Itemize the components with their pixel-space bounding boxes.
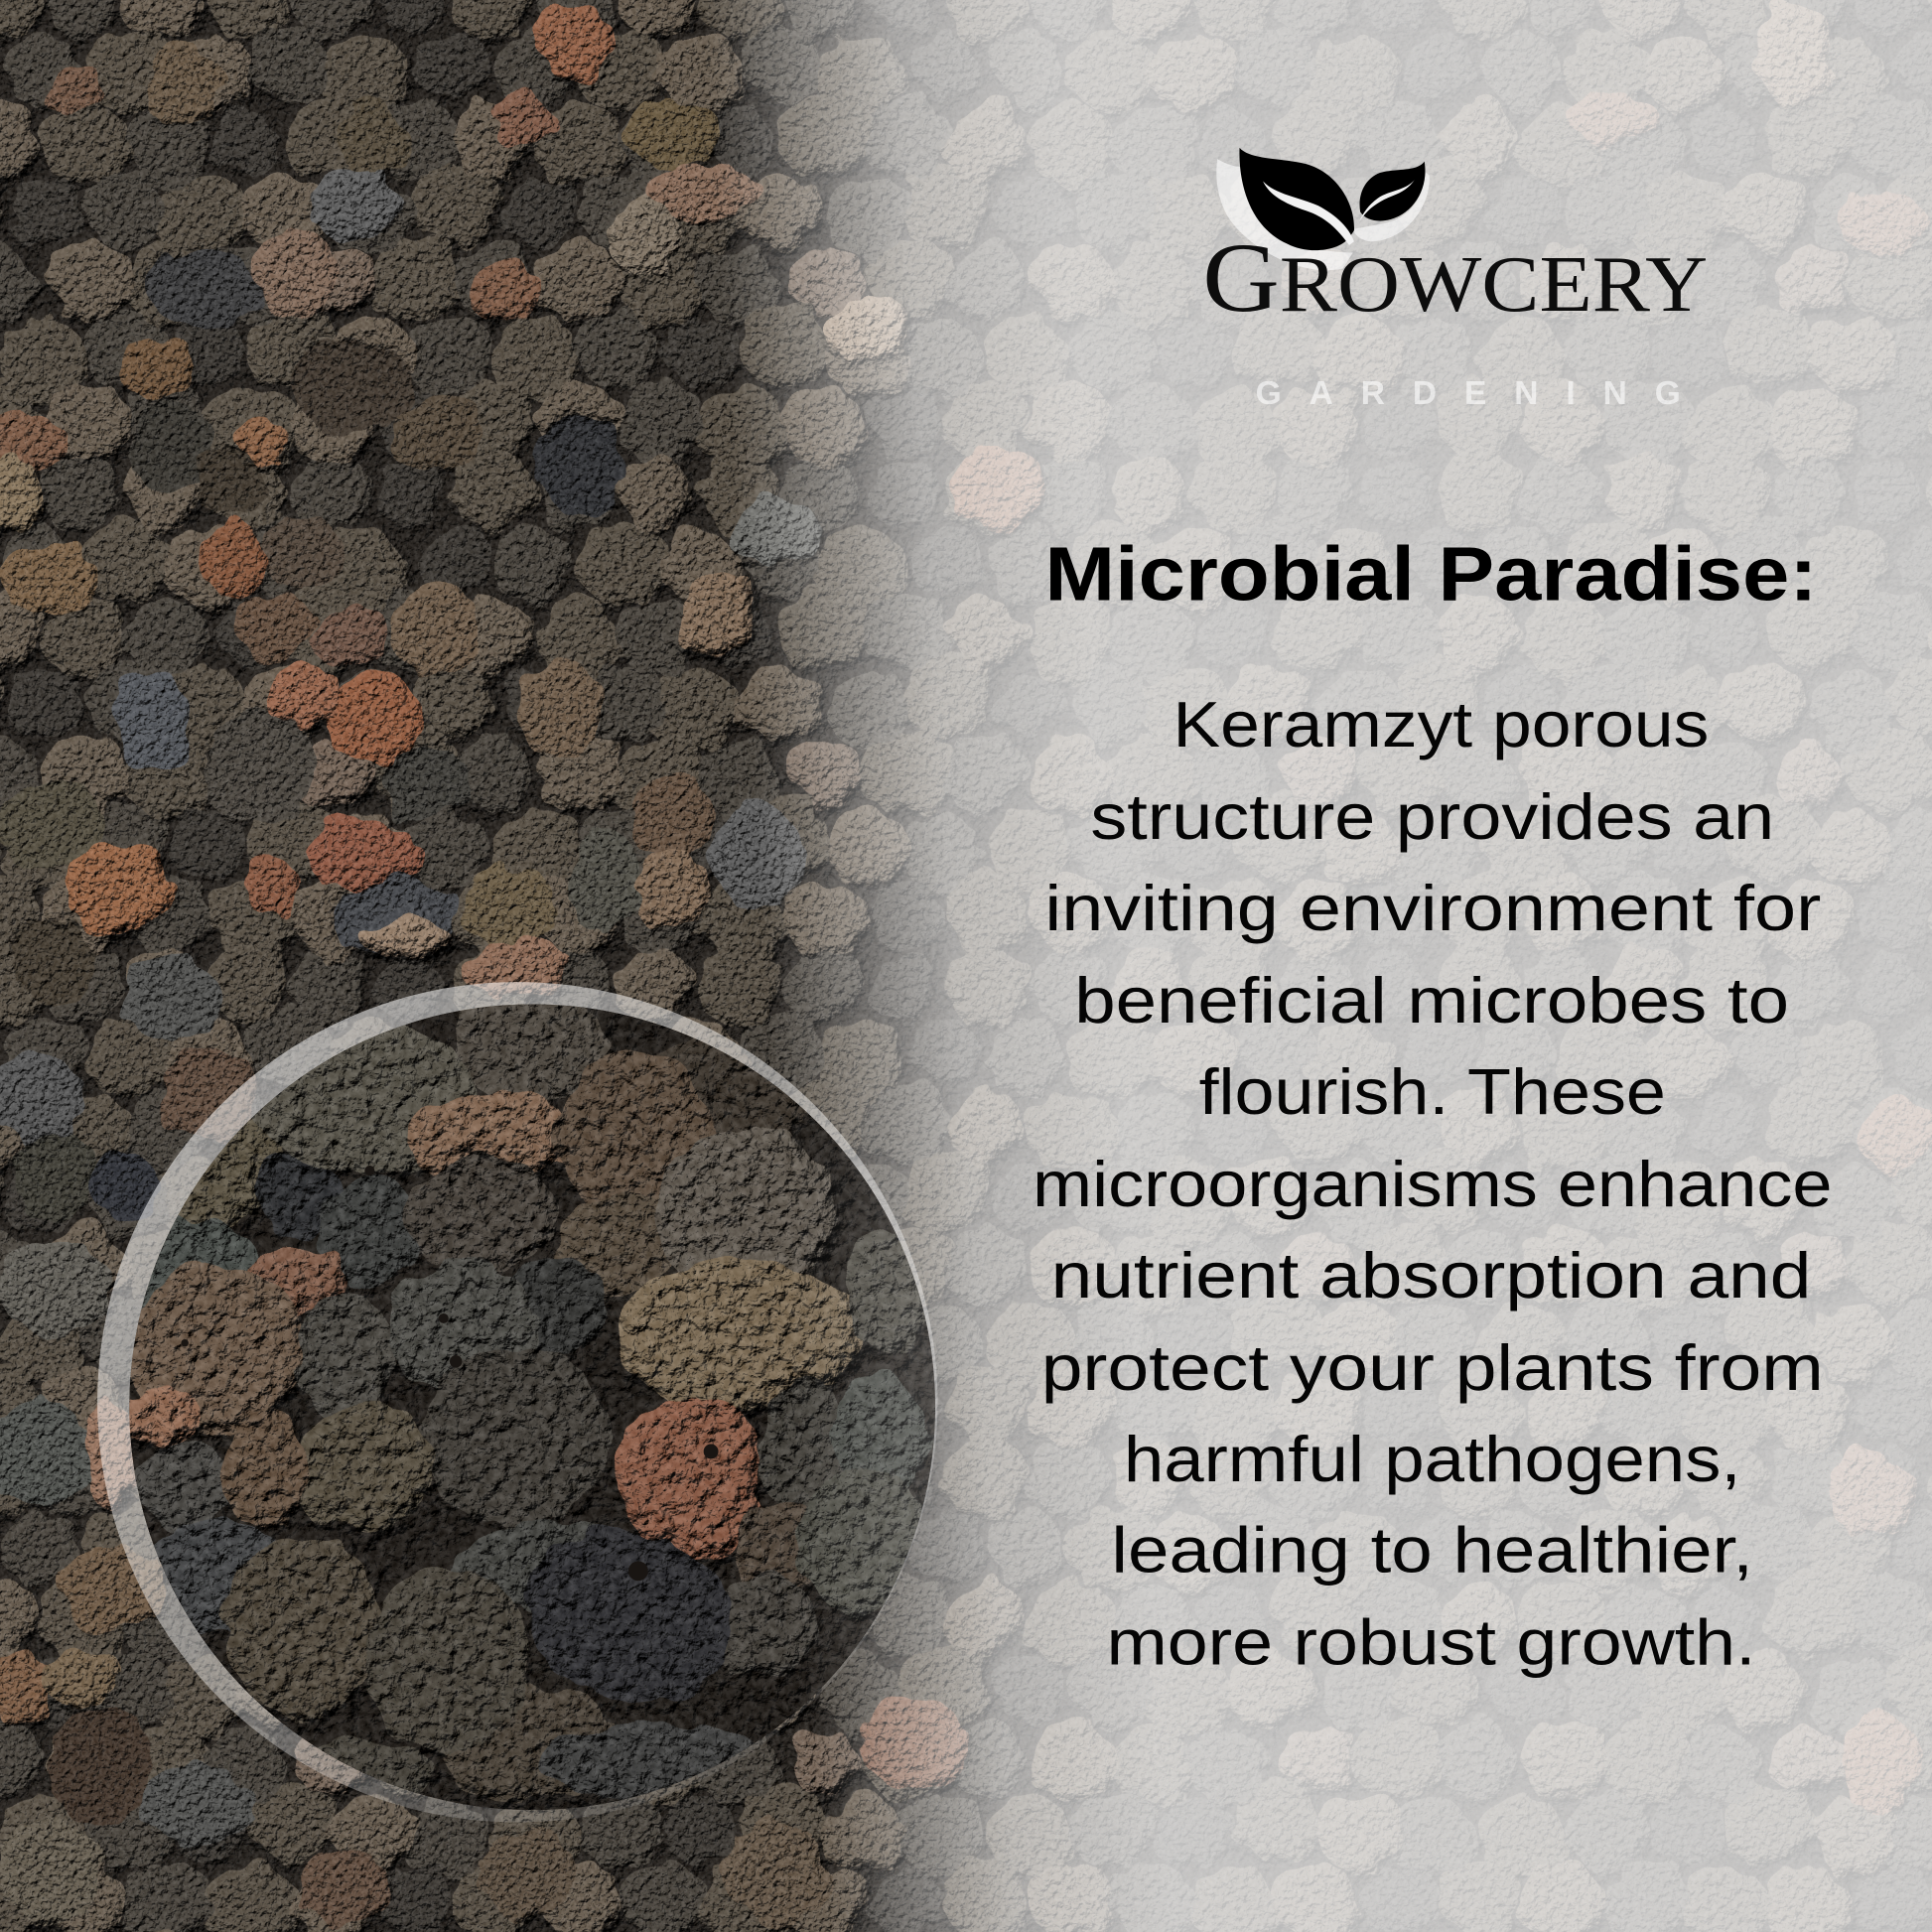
body text: beneficial microbes to: [1074, 965, 1789, 1036]
heading: Microbial Paradise:: [1044, 531, 1818, 617]
magnifier ring: [97, 982, 937, 1823]
body text: Keramzyt porous: [1173, 689, 1709, 760]
body text: [1033, 689, 1832, 1679]
pebble holes: [181, 1166, 719, 1581]
magnifier circle with enlarged pebbles: [97, 982, 937, 1823]
tagline: GARDENING: [1256, 375, 1681, 412]
icon: leaves: [1216, 148, 1430, 270]
body text: nutrient absorption and: [1051, 1240, 1811, 1311]
wordmark: GROWCERY: [1202, 224, 1708, 333]
body text: microorganisms enhance: [1033, 1149, 1832, 1220]
enlarged pebbles: [129, 1005, 935, 1811]
body text: inviting environment for: [1044, 873, 1821, 944]
logo: Growcery Gardening: [1202, 148, 1708, 412]
body text: structure provides an: [1090, 781, 1774, 853]
body text: leading to healthier,: [1111, 1515, 1753, 1587]
body text: flourish. These: [1199, 1056, 1666, 1128]
body text: harmful pathogens,: [1124, 1424, 1741, 1495]
body text: more robust growth.: [1106, 1607, 1756, 1679]
body text: protect your plants from: [1041, 1332, 1824, 1404]
